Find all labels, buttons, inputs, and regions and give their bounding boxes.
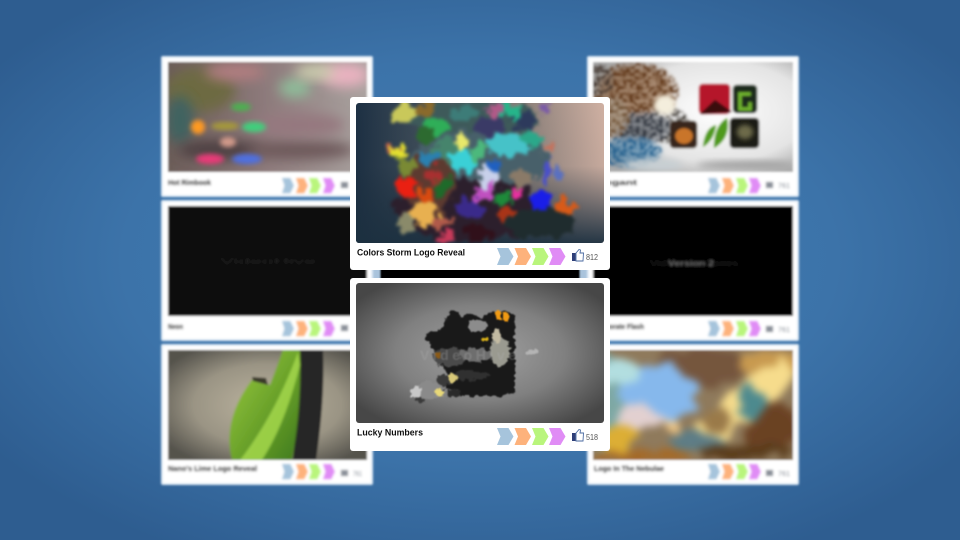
likes — [341, 182, 348, 188]
thumbnail: shattered black numbers: VideoHive — [420, 347, 516, 363]
rating chevrons — [708, 321, 761, 336]
title: Lucky Numbers — [357, 428, 423, 438]
thumbnail: Version 2 — [593, 206, 793, 316]
panel: Colors Storm Logo Reveal card — [350, 97, 610, 270]
like count: 812 — [586, 252, 598, 262]
rating chevrons — [497, 248, 566, 265]
panel: right blurred cards — [572, 56, 802, 485]
rating chevrons — [282, 178, 335, 193]
card: Corporate Flash: VideoHive Series — [650, 259, 738, 268]
panel: blurred middle card behind centre — [367, 199, 593, 342]
label: Corporate Flash — [594, 322, 644, 331]
thumbnail: logo tiles with splatter — [586, 62, 793, 172]
panel: left blurred cards — [161, 56, 373, 485]
label: Neon — [168, 322, 183, 331]
card: Neon — [161, 200, 373, 341]
card: Corporate Flash — [587, 200, 799, 341]
likes — [766, 182, 790, 190]
icon: thumbs up — [572, 430, 584, 441]
likes: 761 — [778, 183, 790, 190]
card: Elegant — [586, 56, 799, 197]
likes — [766, 470, 790, 478]
card: Hot Rimbook — [161, 56, 373, 197]
rating chevrons — [708, 464, 761, 479]
likes — [341, 470, 362, 478]
label: Nano's Lime Logo Reveal — [168, 464, 257, 473]
thumbnail: dark logo — [168, 206, 367, 316]
card: Logo In The Nebulae — [572, 344, 802, 485]
card: Neon: VideoHive — [220, 257, 317, 266]
likes: 761 — [778, 327, 790, 334]
icon: thumbs up — [572, 250, 584, 261]
label: Hot Rimbook — [168, 178, 212, 187]
rating chevrons — [282, 464, 335, 479]
thumbnail: light streaks — [165, 62, 369, 172]
thumbnail: paint storm — [356, 100, 604, 243]
label: Elegant — [594, 178, 638, 187]
panel: Lucky Numbers card — [350, 278, 610, 451]
rating chevrons — [497, 428, 566, 445]
likes — [341, 325, 348, 331]
rating chevrons — [282, 321, 335, 336]
likes: 761 — [778, 471, 790, 478]
like count: 518 — [586, 432, 598, 442]
thumbnail: nebula — [592, 348, 794, 462]
label: Logo In The Nebulae — [594, 464, 664, 473]
thumbnail: green leaf — [168, 349, 367, 460]
rating chevrons — [708, 178, 761, 193]
card: Corporate Flash: Version 2 — [668, 258, 714, 268]
card: Nano's Lime Logo Reveal — [161, 344, 373, 485]
likes: 761 — [353, 471, 362, 478]
thumbnail: shattered black numbers — [356, 283, 604, 423]
title: Colors Storm Logo Reveal — [357, 248, 465, 258]
likes — [766, 326, 790, 334]
